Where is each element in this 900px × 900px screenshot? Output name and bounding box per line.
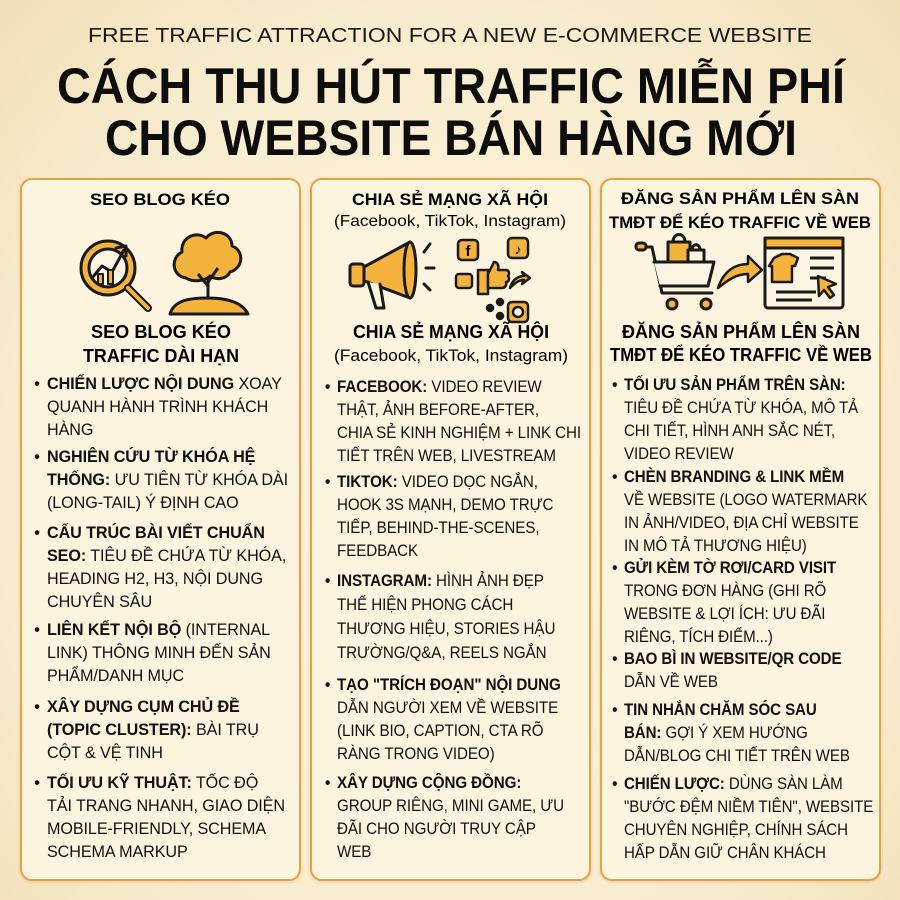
subheading: ĐĂNG SẢN PHẨM LÊN SÀN [622,321,860,342]
heading: ĐĂNG SẢN PHẨM LÊN SÀN [621,189,859,208]
panel: marketplace: CHUYÊN NGHIỆP, CHÍNH SÁCH [624,821,848,839]
panel: marketplace: IN ẢNH/VIDEO, ĐỊA CHỈ WEBSITE [624,514,859,532]
icon: magnifier chart [81,241,148,308]
panel: SEO blog: TỐI ƯU KỸ THUẬT: TỐC ĐỘ [47,774,258,792]
panel: marketplace [600,178,881,881]
subheading: CHIA SẺ MẠNG XÃ HỘI [353,321,549,342]
panel: marketplace: CHIẾN LƯỢC: DÙNG SÀN LÀM [624,775,843,793]
panel: marketplace: DẪN/BLOG CHI TIẾT TRÊN WEB [624,747,850,765]
panel: social: TRƯỜNG/Q&A, REELS NGẮN [337,644,547,662]
panel: SEO blog: (TOPIC CLUSTER): BÀI TRỤ [47,721,259,739]
panel: social: HOOK 3S MẠNH, DEMO TRỰC [337,496,553,514]
panel: social: XÂY DỰNG CỘNG ĐỒNG: [337,774,521,792]
panel: social: THẬT, ẢNH BEFORE-AFTER, [337,401,539,419]
panel: marketplace: WEBSITE & LỢI ÍCH: ƯU ĐÃI [624,605,825,623]
panel: social: ♪ [514,241,522,257]
panel: social: FEEDBACK [337,542,418,560]
panel: SEO blog [20,178,301,881]
panel: social: GROUP RIÊNG, MINI GAME, ƯU [337,797,564,815]
panel: social: TẠO "TRÍCH ĐOẠN" NỘI DUNG [337,676,561,694]
panel: marketplace: CHÈN BRANDING & LINK MỀM [624,468,844,486]
panel: social: RÀNG TRONG VIDEO) [337,745,495,763]
heading: CHIA SẺ MẠNG XÃ HỘI [352,189,548,209]
panel: SEO blog: LIÊN KẾT NỘI BỘ (INTERNAL [47,621,270,639]
heading: TMĐT ĐỂ KÉO TRAFFIC VỀ WEB [609,213,871,232]
icon: tree [170,232,248,314]
panel: SEO blog: MOBILE-FRIENDLY, SCHEMA [47,820,266,838]
panel: marketplace: RIÊNG, TÍCH ĐIỂM...) [624,628,773,646]
subheading [610,321,872,365]
subheading [83,321,239,366]
panel: SEO blog: CHIẾN LƯỢC NỘI DUNG XOAY [47,375,282,393]
panel: marketplace: TRONG ĐƠN HÀNG (GHI RÕ [624,582,826,600]
panel: social: (Facebook, TikTok, Instagram) [334,213,566,230]
panel: SEO blog: HÀNG [47,421,93,439]
panel: SEO blog: XÂY DỰNG CỤM CHỦ ĐỀ [47,698,240,716]
panel: marketplace: CHI TIẾT, HÌNH ANH SẮC NÉT, [624,422,835,440]
panel: marketplace: TIÊU ĐỀ CHỨA TỪ KHÓA, MÔ TẢ [624,399,858,417]
panel: SEO blog: QUANH HÀNH TRÌNH KHÁCH [47,398,268,416]
panel: SEO blog: THỐNG: ƯU TIÊN TỪ KHÓA DÀI [47,471,288,489]
panel: marketplace: BAO BÌ IN WEBSITE/QR CODE [624,650,841,668]
panel: social: TIKTOK: VIDEO DỌC NGẮN, [337,473,538,491]
panel: social: TIẾP, BEHIND-THE-SCENES, [337,519,539,537]
panel: SEO blog: CỘT & VỆ TINH [47,744,163,762]
panel: SEO blog: SEO: TIÊU ĐỀ CHỨA TỪ KHÓA, [47,547,286,565]
panel: SEO blog: NGHIÊN CỨU TỪ KHÓA HỆ [47,448,255,466]
panel: marketplace: TIN NHẮN CHĂM SÓC SAU [624,701,817,719]
subheading: SEO BLOG KÉO [91,321,231,342]
panel: social: INSTAGRAM: HÌNH ẢNH ĐẸP [337,572,544,590]
title: CÁCH THU HÚT TRAFFIC MIỄN PHÍ [57,58,846,114]
heading: SEO BLOG KÉO [90,190,230,209]
icon: social media [456,238,530,322]
panel: social: DẪN NGƯỜI XEM VỀ WEBSITE [337,699,558,717]
panel: social: FACEBOOK: VIDEO REVIEW [337,378,542,396]
panel: SEO blog: CHUYÊN SÂU [47,593,152,611]
panel: SEO blog: PHẨM/DANH MỤC [47,667,184,685]
panel: social [310,178,591,881]
icon: cart [636,234,714,309]
panel: marketplace: DẪN VỀ WEB [624,673,718,691]
bullet list [612,375,873,862]
panel: social: (Facebook, TikTok, Instagram) [334,347,568,365]
panel: marketplace: TỐI ƯU SẢN PHẨM TRÊN SÀN: [624,376,846,394]
panel: SEO blog: LINK) THÔNG MINH ĐẾN SẢN [47,644,271,662]
panel: marketplace: "BƯỚC ĐỆM NIỀM TIÊN", WEBSITE [624,798,873,816]
panel: marketplace: HẤP DẪN GIỮ CHÂN KHÁCH [624,844,826,862]
panel: SEO blog: SCHEMA MARKUP [47,843,188,861]
panel: SEO blog: TẢI TRANG NHANH, GIAO DIỆN [47,797,285,815]
panel: social: THƯƠNG HIỆU, STORIES HẬU [337,620,555,638]
bullet list [326,378,581,861]
panel: marketplace: IN MÔ TẢ THƯƠNG HIỆU) [624,537,807,555]
panel: SEO blog: CẤU TRÚC BÀI VIẾT CHUẨN [47,524,265,542]
panel: social: (LINK BIO, CAPTION, CTA RÕ [337,722,544,740]
title: CHO WEBSITE BÁN HÀNG MỚI [105,110,797,166]
panel: social: WEB [337,843,371,861]
panel: social: CHIA SẺ KINH NGHIỆM + LINK CHI [337,424,581,442]
panel: social: THỂ HIỆN PHONG CÁCH [337,596,513,614]
panel: social: TIẾT TRÊN WEB, LIVESTREAM [337,447,556,465]
header [57,25,846,166]
bullet list [34,374,288,861]
heading [609,189,871,232]
title [57,58,846,166]
panel: social: ĐÃI CHO NGƯỜI TRUY CẬP [337,820,536,838]
subheading: TRAFFIC DÀI HẠN [83,345,239,366]
arrow [718,256,762,288]
panel: SEO blog: (LONG-TAIL) Ý ĐỊNH CAO [47,494,239,512]
subtitle: FREE TRAFFIC ATTRACTION FOR A NEW E-COMMERCE WEBSITE [88,25,812,47]
icon: megaphone [350,242,434,308]
panel: marketplace: BÁN: GỢI Ý XEM HƯỚNG [624,724,808,742]
panel: SEO blog: HEADING H2, H3, NỘI DUNG [47,570,263,588]
panel: marketplace: GỬI KÈM TỜ RƠI/CARD VISIT [624,559,836,577]
panel: marketplace: VỀ WEBSITE (LOGO WATERMARK [624,491,867,509]
icon: browser [765,238,843,308]
panel: marketplace: VIDEO REVIEW [624,445,734,463]
panel: social: f [466,243,472,260]
